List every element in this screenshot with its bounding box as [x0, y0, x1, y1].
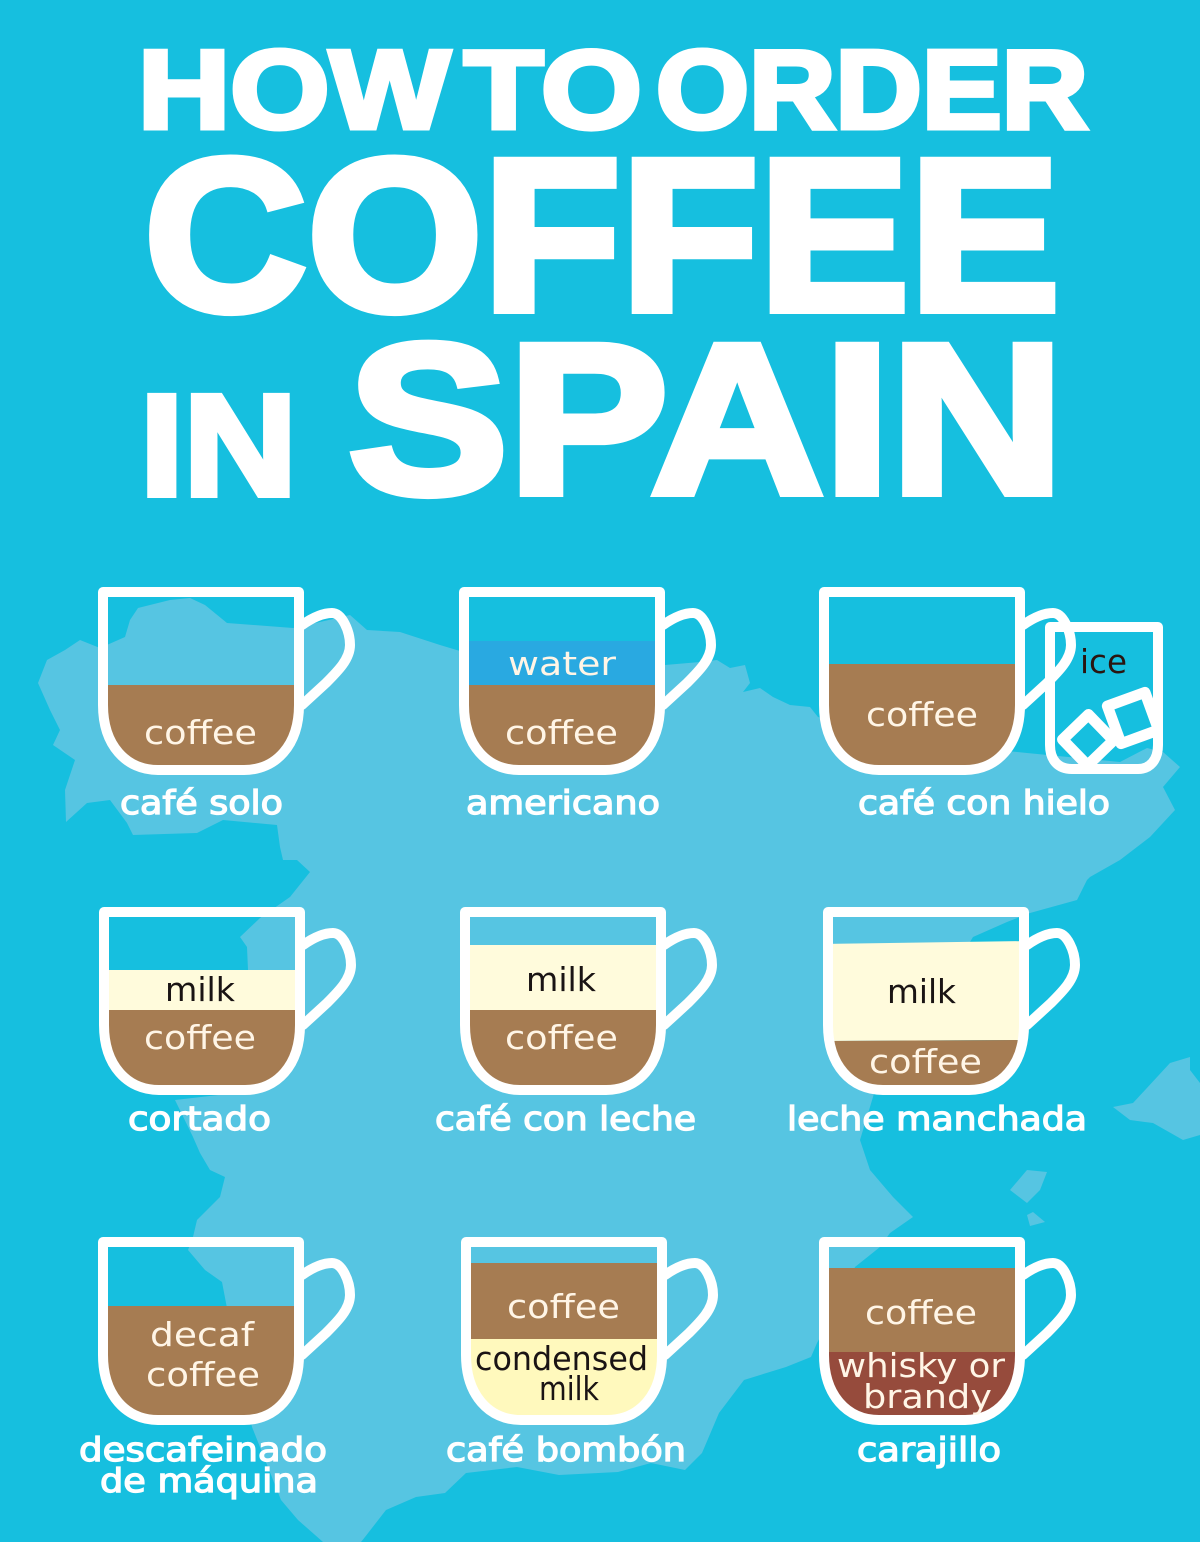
iced glass — [1050, 627, 1159, 769]
title — [138, 28, 1088, 539]
cup: carajillo: whisky or — [837, 1346, 1005, 1385]
cup: cortado: milk — [165, 970, 236, 1009]
cup: leche manchada: coffee — [869, 1042, 982, 1081]
cup: descafeinado de máquina: descafeinado — [79, 1430, 327, 1469]
cup: cortado: cortado — [128, 1099, 271, 1138]
cup: café con hielo: café con hielo — [858, 783, 1110, 822]
cup: leche manchada — [787, 912, 1087, 1138]
iced glass: ice — [1080, 642, 1127, 681]
cup: café bombón: coffee — [507, 1287, 620, 1326]
cup: descafeinado de máquina: coffee — [146, 1355, 260, 1394]
cup: americano: coffee — [505, 713, 618, 752]
cup: café solo — [98, 592, 350, 822]
cup: café con leche: milk — [526, 960, 597, 999]
cup: café bombón: milk — [539, 1369, 600, 1408]
title: ORDER — [656, 28, 1088, 152]
cup: descafeinado de máquina: decaf — [150, 1315, 256, 1354]
cup: café bombón: condensed — [475, 1339, 648, 1378]
cup: descafeinado de máquina: de máquina — [100, 1461, 318, 1500]
cup: americano: americano — [466, 783, 660, 822]
cup: café solo: coffee — [144, 713, 257, 752]
title: IN — [140, 365, 297, 526]
cup: descafeinado de máquina — [79, 1242, 350, 1500]
cup: americano — [459, 592, 711, 822]
cup: cortado — [99, 912, 351, 1138]
cup: leche manchada: milk — [887, 972, 957, 1011]
cup: café con hielo — [819, 592, 1110, 822]
title: SPAIN — [348, 300, 1064, 539]
cup: café con leche: café con leche — [435, 1099, 696, 1138]
title: COFFEE — [144, 114, 1060, 356]
cup: americano: water — [508, 644, 616, 683]
cup: carajillo: brandy — [863, 1377, 992, 1416]
cup: cortado: coffee — [144, 1018, 256, 1057]
cup: carajillo: carajillo — [857, 1430, 1001, 1469]
cup: carajillo: coffee — [865, 1293, 977, 1332]
cup: leche manchada: leche manchada — [787, 1099, 1087, 1138]
cup: café con leche: coffee — [505, 1018, 618, 1057]
map of Spain — [38, 598, 1200, 1542]
cup: café solo: café solo — [120, 783, 283, 822]
title: HOW — [138, 28, 450, 152]
cup: café con leche — [435, 912, 712, 1138]
cup: café con hielo: coffee — [866, 695, 978, 734]
cup: café bombón: café bombón — [446, 1430, 686, 1469]
cup: café bombón — [446, 1242, 713, 1469]
cup: carajillo — [819, 1242, 1071, 1469]
title: TO — [464, 28, 642, 152]
